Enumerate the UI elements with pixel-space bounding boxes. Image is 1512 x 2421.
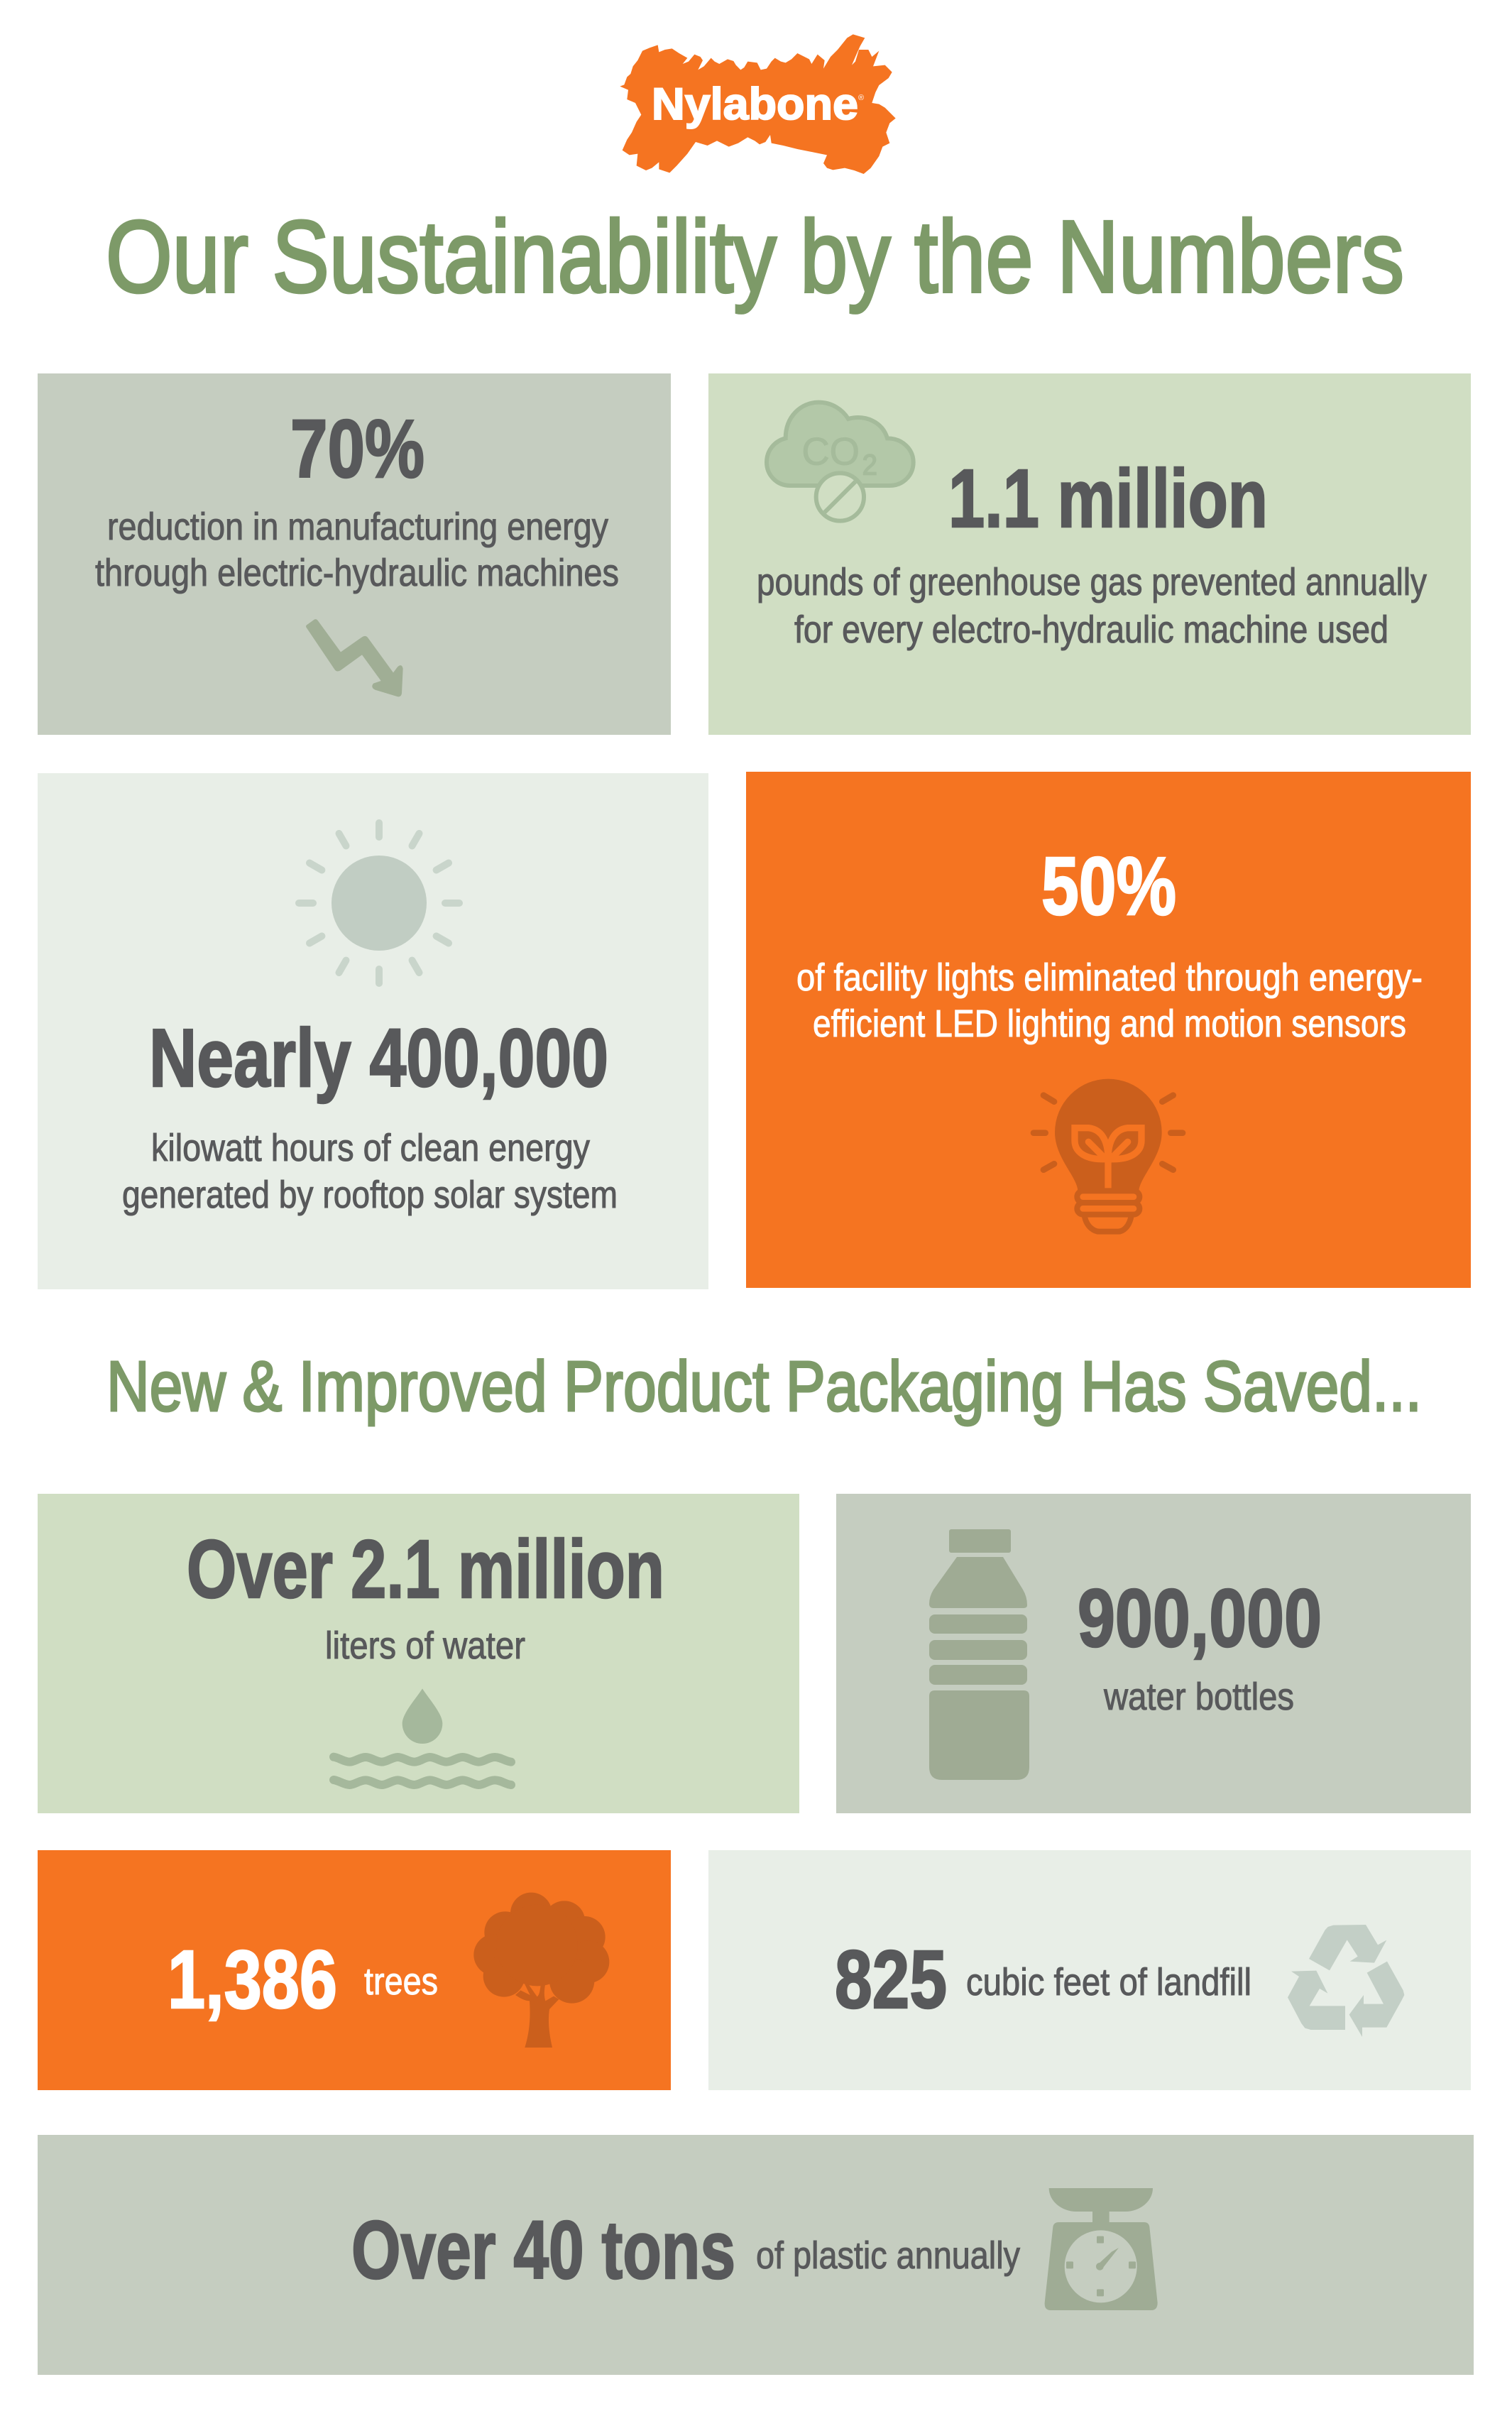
description: [796, 956, 1423, 1045]
panel background: [38, 2135, 1474, 2375]
label: cubic feet of landfill: [966, 1961, 1251, 2004]
panel: landfill: [708, 1850, 1471, 2090]
icon: light bulb with plant: [1034, 1079, 1183, 1232]
panel: 50% facility lights: [746, 772, 1471, 1288]
stat: 1,386: 1,386: [168, 1933, 337, 2026]
panel background: [38, 373, 671, 735]
panel: nearly 400,000 solar: [38, 773, 708, 1289]
panel: trees: [38, 1850, 671, 2090]
panel: water bottles: [836, 1494, 1471, 1813]
icon: water drop: [334, 1688, 511, 1785]
panel background: [38, 1850, 671, 2090]
description: kilowatt hours of clean energy: [151, 1127, 590, 1169]
description: [122, 1127, 618, 1216]
icon: down arrow: [306, 619, 403, 696]
stat: 825: 825: [835, 1933, 947, 2026]
panel background: [746, 772, 1471, 1288]
icon: CO2 cloud: CO: [801, 429, 860, 473]
stat: 50%: 50%: [1041, 840, 1176, 932]
icon: CO2 cloud: 2: [862, 449, 877, 481]
label: liters of water: [325, 1624, 525, 1667]
description: reduction in manufacturing energy: [107, 505, 608, 548]
icon: bottle: [929, 1529, 1029, 1780]
label: water bottles: [1103, 1676, 1294, 1718]
icon: sun: [299, 823, 459, 983]
panel background: [708, 1850, 1471, 2090]
panel: 1.1 million greenhouse gas: [708, 373, 1471, 735]
stat: 1.1 million: 1.1 million: [948, 452, 1268, 545]
description: [95, 505, 619, 594]
stat: Nearly 400,000: Nearly 400,000: [149, 1012, 608, 1104]
panel background: [708, 373, 1471, 735]
panel background: [38, 1494, 799, 1813]
logo: Nylabone: [620, 34, 896, 174]
stat: 70%: 70%: [290, 403, 424, 495]
panel: 70% manufacturing energy: [38, 373, 671, 735]
icon: CO2 cloud: [767, 403, 914, 521]
description: for every electro-hydraulic machine used: [794, 608, 1388, 651]
description: [757, 561, 1427, 651]
registered mark: ®: [858, 94, 864, 102]
logo wordmark: Nylabone: [652, 80, 858, 129]
description: efficient LED lighting and motion sensors: [813, 1002, 1406, 1045]
label: of plastic annually: [756, 2234, 1020, 2277]
label: trees: [364, 1960, 438, 2003]
description: generated by rooftop solar system: [122, 1174, 618, 1216]
icon: tree: [473, 1893, 609, 2048]
description: of facility lights eliminated through energy-: [796, 956, 1423, 999]
description: through electric-hydraulic machines: [95, 552, 619, 594]
panel: liters of water: [38, 1494, 799, 1813]
stat: Over 40 tons: Over 40 tons: [351, 2204, 735, 2296]
icon: kitchen scale: [1045, 2188, 1158, 2310]
panel background: [38, 773, 708, 1289]
icon: recycle: [1288, 1925, 1404, 2037]
panel background: [836, 1494, 1471, 1813]
stat: 900,000: 900,000: [1078, 1572, 1322, 1664]
stat: Over 2.1 million: Over 2.1 million: [187, 1523, 664, 1615]
panel: plastic: [38, 2135, 1474, 2375]
logo brush shape: [620, 34, 896, 174]
